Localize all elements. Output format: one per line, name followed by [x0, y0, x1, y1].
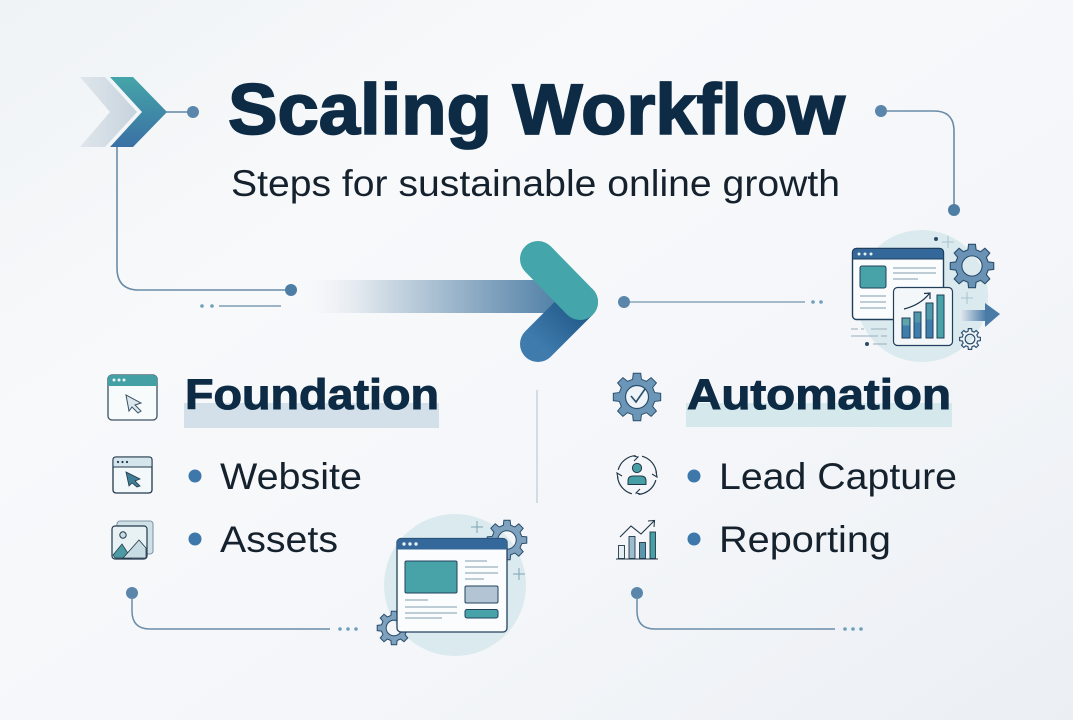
connector: title to automation illustration: [875, 105, 960, 216]
label: Reporting: Reporting: [719, 519, 891, 560]
gear large: [950, 244, 994, 288]
connector: foundation bottom: [126, 587, 358, 631]
icon: lead capture: [613, 451, 661, 499]
gear top right: [487, 520, 527, 560]
subtitle: Steps for sustainable online growth: [231, 163, 840, 204]
chart card: [894, 288, 952, 346]
bullet: [188, 532, 202, 546]
divider: [536, 390, 538, 503]
connector: main arrow to illustration: [618, 296, 823, 308]
connector: logo to title dot: [166, 106, 199, 118]
label: Website: Website: [220, 456, 362, 497]
icon: Foundation browser: [108, 375, 157, 420]
main arrow: [300, 259, 580, 344]
illustration: foundation website: [377, 514, 527, 656]
gear small: [960, 329, 980, 349]
sparkles: [471, 521, 525, 580]
icon: assets: [112, 521, 153, 559]
title: Scaling Workflow: [228, 71, 846, 150]
icon: website: [113, 457, 152, 493]
connector: logo down to main arrow: [117, 147, 297, 308]
icon: Automation gear with check: [613, 373, 661, 421]
illustration: automation dashboard: [851, 230, 1000, 362]
bullet: [688, 532, 700, 546]
heading: Foundation: Foundation: [185, 371, 439, 419]
sparkles: [942, 236, 973, 304]
gear bottom left: [377, 611, 411, 645]
label: Assets: Assets: [220, 519, 338, 560]
list: Foundation items: [112, 456, 362, 560]
connector: automation bottom: [631, 587, 863, 631]
browser window: [397, 538, 507, 632]
icon: reporting chart: [616, 520, 658, 559]
output arrow: [960, 303, 1000, 327]
icon: double chevron logo: [80, 77, 167, 147]
list: Automation items: [613, 451, 957, 560]
bullet: [688, 470, 700, 482]
label: Lead Capture: Lead Capture: [719, 456, 957, 497]
browser window: [852, 248, 944, 320]
bullet: [188, 470, 202, 482]
heading: Automation: Automation: [687, 371, 951, 419]
